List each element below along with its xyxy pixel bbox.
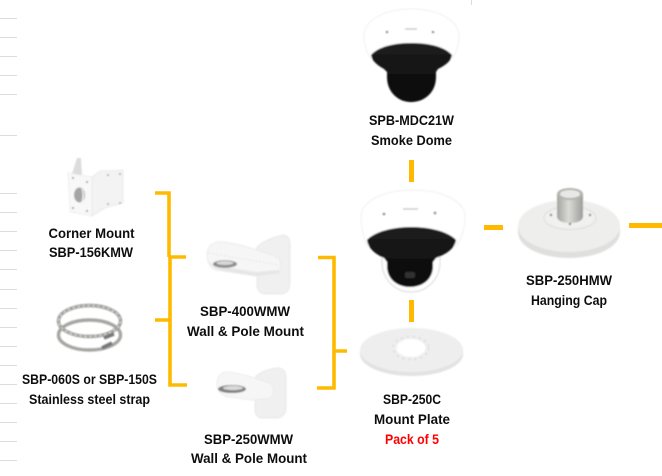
icon: corner mount <box>68 158 123 216</box>
label: hanging cap: SBP-250HMW <box>526 272 613 288</box>
label: corner mount: SBP-156KMW <box>49 244 134 260</box>
icon: mount plate <box>360 328 463 376</box>
label: stainless steel strap: Stainless steel strap <box>29 391 150 407</box>
label: corner mount: Corner Mount <box>48 225 135 241</box>
label: hanging cap: Hanging Cap <box>531 292 607 308</box>
label: mount plate: Mount Plate <box>374 411 450 427</box>
bracket: wall mounts to mount plate <box>317 258 347 388</box>
connector: camera to hanging cap <box>484 225 503 230</box>
label: wall and pole mount 250: Wall & Pole Mount <box>191 450 307 466</box>
label: wall and pole mount 400: SBP-400WMW <box>200 303 291 319</box>
icon: hanging cap <box>518 188 620 258</box>
connector: dome to camera <box>409 160 414 182</box>
label: wall and pole mount 250 <box>191 431 307 466</box>
label: smoke dome: Smoke Dome <box>371 132 452 148</box>
label: corner mount <box>48 225 135 260</box>
label: smoke dome <box>369 112 455 148</box>
icon: wall and pole mount 250 <box>217 368 286 418</box>
label: mount plate: SBP-250C <box>383 391 441 407</box>
bracket: corner mount and strap to wall mounts <box>155 193 187 385</box>
label: stainless steel strap <box>22 371 157 407</box>
label: wall and pole mount 400 <box>187 303 304 339</box>
icon: wall and pole mount 400 <box>207 235 290 294</box>
label: hanging cap <box>526 272 613 308</box>
label: stainless steel strap: SBP-060S or SBP-150S <box>22 371 157 387</box>
label: smoke dome: SPB-MDC21W <box>369 112 455 128</box>
connector: camera to mount plate <box>409 300 414 322</box>
label: pack of 5: Pack of 5 <box>385 431 439 447</box>
icon: smoke dome camera <box>364 9 459 102</box>
label: wall and pole mount 400: Wall & Pole Mount <box>187 323 304 339</box>
label: wall and pole mount 250: SBP-250WMW <box>204 431 294 447</box>
icon: stainless steel straps <box>58 306 120 350</box>
connector: hanging cap onward <box>629 223 662 228</box>
label: mount plate <box>374 391 450 447</box>
icon: main dome camera <box>361 190 465 292</box>
